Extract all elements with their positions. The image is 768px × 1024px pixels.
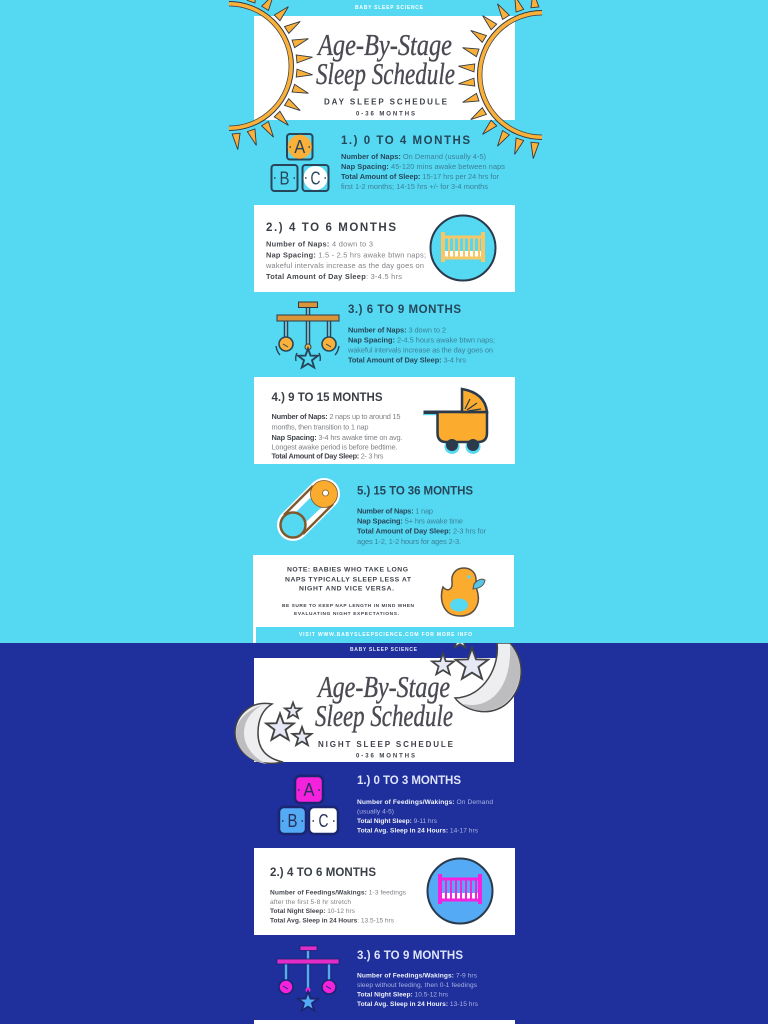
title: Age-By-Stage (316, 669, 450, 704)
text block: 0 to 3 months (357, 775, 493, 834)
icon: safety pin (280, 480, 338, 538)
title: Age-By-Stage (316, 27, 452, 62)
icon: crib in circle (430, 216, 496, 280)
icon: left moon and stars (235, 702, 312, 764)
panel: next section start (254, 1020, 515, 1024)
icon: day crib mobile (276, 302, 339, 368)
title (316, 27, 455, 91)
details: Longest awake period is before bedtime. (272, 442, 398, 452)
icon: left sun (229, 0, 313, 150)
icon: night alphabet blocks: A (304, 780, 314, 800)
text block: 6 to 9 months (347, 304, 495, 364)
text block: night 6 to 9 months: Number of Feedings/Wakings: 7-9 hrs (357, 972, 478, 980)
details: Number of Naps: 4 down to 3 (266, 240, 373, 248)
details: wakeful intervals increase as the day goes on (265, 261, 424, 270)
night section background (0, 643, 768, 1024)
text block: night 6 to 9 months: sleep without feeding, then 0-1 feedings (357, 982, 478, 989)
icon: night crib mobile (277, 946, 339, 1011)
text block: 0 to 4 months: first 1-2 months; 14-15 hrs +/- for 3-4 months (341, 182, 488, 191)
text block: 6 to 9 months: Number of Naps: 3 down to 2 (348, 326, 446, 334)
panel: 4 to 6 months (254, 205, 515, 292)
note text: EVALUATING NIGHT EXPECTATIONS. (294, 611, 399, 617)
text block: 6 to 9 months: Total Amount of Day Sleep: 3-4 hrs (348, 356, 466, 364)
icon: day alphabet blocks: A (294, 137, 305, 157)
icon: rubber duck (441, 568, 485, 616)
details (272, 412, 402, 460)
title (315, 669, 453, 733)
note text: NOTE: BABIES WHO TAKE LONG (287, 566, 408, 574)
text block: 6 to 9 months: Nap Spacing: 2-4.5 hours awake btwn naps; (348, 336, 495, 344)
details: Total Amount of Day Sleep: 3-4.5 hrs (266, 272, 402, 281)
icon: night alphabet blocks: B (288, 811, 298, 831)
text block: 15 to 36 months: 5.) 15 TO 36 MONTHS (357, 486, 473, 498)
subtitle: DAY SLEEP SCHEDULE (324, 98, 448, 106)
details: Nap Spacing: 3-4 hrs awake time on avg. (272, 433, 402, 442)
icon: stroller (423, 389, 487, 454)
details: Total Night Sleep: 10-12 hrs (270, 908, 356, 915)
details: Number of Naps: 2 naps up to around 15 (272, 412, 400, 421)
text block: 0 to 4 months: Nap Spacing: 45-120 mins awake between naps (341, 162, 505, 171)
text block: 15 to 36 months: Nap Spacing: 5+ hrs awake time (357, 516, 463, 526)
title: Sleep Schedule (316, 56, 455, 91)
text block: 0 to 4 months: Total Amount of Sleep: 15-17 hrs per 24 hrs for (341, 172, 500, 181)
icon: right sun (458, 0, 542, 159)
text block: 0 to 3 months: Number of Feedings/Wakings: On Demand (357, 799, 493, 806)
text block: 15 to 36 months: Total Amount of Day Sleep: 2-3 hrs for (357, 526, 487, 536)
title: Sleep Schedule (315, 698, 453, 733)
note text: NAPS TYPICALLY SLEEP LESS AT (285, 576, 412, 584)
note text: BE SURE TO KEEP NAP LENGTH IN MIND WHEN (282, 603, 415, 609)
text block: 0 to 3 months: Total Night Sleep: 9-11 hrs (357, 818, 438, 825)
age range: 0-36 MONTHS (356, 754, 415, 760)
icon: day alphabet blocks (272, 134, 328, 191)
panel: 9 to 15 months (254, 377, 515, 464)
text block: 0 to 4 months (341, 135, 505, 191)
panel: note (253, 555, 514, 643)
day header panel (254, 5, 515, 120)
text block: 0 to 3 months: 1.) 0 TO 3 MONTHS (357, 775, 461, 787)
details: Number of Feedings/Wakings: 1-3 feedings (270, 890, 407, 896)
details (270, 890, 407, 924)
panel: night 4 to 6 months (254, 848, 515, 935)
note text: NIGHT AND VICE VERSA. (299, 586, 394, 592)
heading: 4.) 9 TO 15 MONTHS (272, 392, 383, 404)
text block: 0 to 4 months: 1.) 0 TO 4 MONTHS (341, 135, 470, 147)
details: Total Amount of Day Sleep: 2- 3 hrs (272, 452, 384, 460)
day section background (0, 0, 768, 643)
heading: 2.) 4 TO 6 MONTHS (270, 867, 376, 879)
icon: night alphabet blocks: C (318, 811, 328, 831)
icon: top-right moon and stars (430, 643, 522, 712)
details (265, 240, 426, 281)
heading: 2.) 4 TO 6 MONTHS (266, 222, 396, 234)
text block: 15 to 36 months: ages 1-2, 1-2 hours for ages 2-3. (357, 537, 461, 546)
text block: 15 to 36 months: Number of Naps: 1 nap (357, 506, 433, 516)
icon: day alphabet blocks: C (310, 168, 320, 188)
text block: 6 to 9 months: wakeful intervals increase as the day goes on (347, 346, 493, 354)
text block: 6 to 9 months: 3.) 6 TO 9 MONTHS (348, 304, 461, 316)
icon: day alphabet blocks: B (280, 168, 290, 188)
age range: 0-36 MONTHS (356, 112, 415, 118)
text block: 0 to 3 months: (usually 4-5) (357, 808, 394, 816)
details: Nap Spacing: 1.5 - 2.5 hrs awake btwn naps; (266, 250, 426, 260)
footer link bar (256, 627, 514, 643)
brand line: BABY SLEEP SCIENCE (350, 647, 418, 653)
icon: night alphabet blocks (279, 776, 338, 834)
icon: crib in circle (428, 858, 492, 924)
details: months, then transition to 1 nap (272, 422, 368, 432)
text block: night 6 to 9 months: Total Night Sleep: 10.5-12 hrs (357, 992, 449, 998)
details: Total Avg. Sleep in 24 Hours: 13.5-15 hrs (270, 918, 395, 924)
text block: 0 to 4 months: Number of Naps: On Demand (usually 4-5) (341, 152, 486, 161)
text block: 0 to 3 months: Total Avg. Sleep in 24 Hours: 14-17 hrs (357, 828, 479, 834)
subtitle: NIGHT SLEEP SCHEDULE (318, 740, 454, 749)
night header panel (254, 647, 514, 762)
note text (282, 566, 415, 617)
details: after the first 5-8 hr stretch (270, 899, 351, 906)
brand line: BABY SLEEP SCIENCE (355, 5, 424, 11)
footer link bar: VISIT WWW.BABYSLEEPSCIENCE.COM FOR MORE INFO (299, 632, 472, 638)
text block: night 6 to 9 months: Total Avg. Sleep in 24 Hours: 13-15 hrs (357, 1001, 479, 1008)
text block: night 6 to 9 months (357, 950, 479, 1008)
text block: 15 to 36 months (357, 486, 487, 546)
text block: night 6 to 9 months: 3.) 6 TO 9 MONTHS (357, 950, 463, 962)
